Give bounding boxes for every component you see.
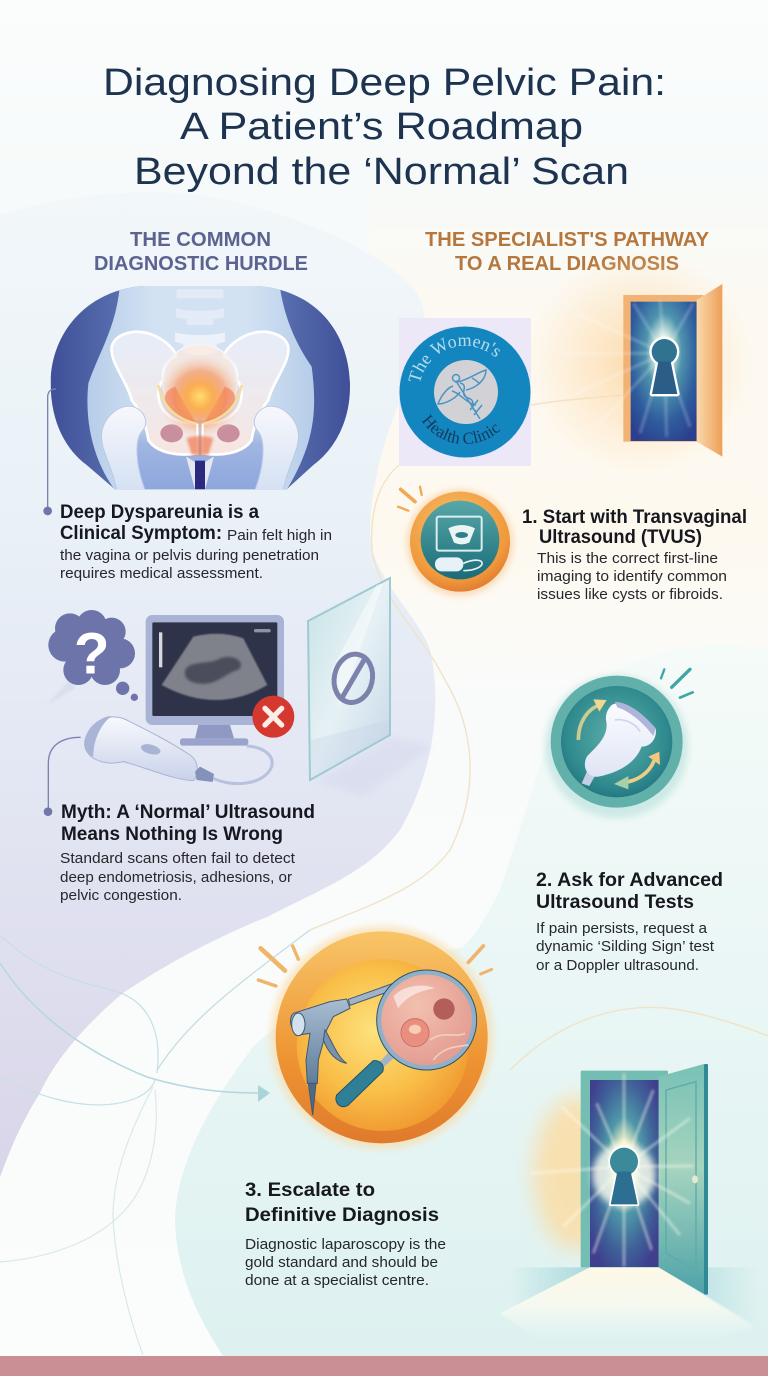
text: step 2: 2. Ask for Advanced <box>536 870 723 891</box>
heading: the common diagnostic hurdle <box>94 229 308 275</box>
logo: the women's health clinic <box>399 318 531 466</box>
logo: the women's health clinic: Health Clinic <box>422 414 500 444</box>
decorative ticks <box>258 946 492 986</box>
text: myth: Standard scans often fail to detect <box>60 850 296 867</box>
logo: the women's health clinic: The Women's <box>408 337 500 382</box>
right iliac wing <box>203 332 288 455</box>
illustration: ultrasound monitor, probe, myth <box>44 578 433 816</box>
text: myth: deep endometriosis, adhesions, or <box>60 869 292 886</box>
text: step 1: 1. Start with Transvaginal <box>522 507 747 528</box>
bottom band <box>0 1356 768 1376</box>
text: step 2: If pain persists, request a <box>536 920 708 937</box>
title: Beyond the ‘Normal’ Scan <box>134 151 629 193</box>
text: deep dyspareunia <box>60 502 332 582</box>
icon: question cloud <box>47 610 138 705</box>
arrow into step 3 <box>258 1085 270 1102</box>
text: deep dyspareunia: Pain felt high in <box>227 527 332 544</box>
text: step 1: imaging to identify common <box>537 568 727 585</box>
icon: step 1 ultrasound monitor <box>398 487 513 596</box>
text: step 3: Definitive Diagnosis <box>245 1205 439 1226</box>
text: step 2 <box>536 870 723 974</box>
icon: step 2 probe with motion arrows <box>545 669 693 818</box>
text: step 1: issues like cysts or fibroids. <box>537 586 723 603</box>
text: step 3: done at a specialist centre. <box>245 1272 429 1289</box>
text: deep dyspareunia: the vagina or pelvis during penetration <box>60 547 319 564</box>
title <box>103 62 666 193</box>
text: myth: Means Nothing Is Wrong <box>61 824 283 845</box>
illustration: teal door with keyhole <box>500 1064 758 1340</box>
heading: the specialist's pathway <box>425 229 710 275</box>
title: A Patient’s Roadmap <box>180 106 583 148</box>
keyhole <box>652 339 677 394</box>
callout pointer <box>44 737 81 816</box>
text: deep dyspareunia: requires medical assessment. <box>60 565 263 582</box>
text: step 2: dynamic ‘Silding Sign’ test <box>536 938 715 955</box>
text: step 1: This is the correct first-line <box>537 550 718 567</box>
text: step 3: Diagnostic laparoscopy is the <box>245 1236 446 1253</box>
title: Diagnosing Deep Pelvic Pain: <box>103 62 666 104</box>
text: step 3: 3. Escalate to <box>245 1180 375 1201</box>
text: myth <box>60 802 315 904</box>
decorative ticks <box>661 669 693 698</box>
illustration: pelvis with pain glow <box>43 283 351 515</box>
text: step 2: or a Doppler ultrasound. <box>536 957 699 974</box>
text: myth: Myth: A ‘Normal’ Ultrasound <box>61 802 315 823</box>
text: deep dyspareunia: Clinical Symptom: <box>60 523 222 544</box>
heading: the specialist's pathway: TO A REAL DIAGNOSIS <box>455 253 679 275</box>
pathway connector lines <box>0 395 768 1355</box>
heading: the specialist's pathway: THE SPECIALIST'S PATHWAY <box>425 229 710 251</box>
text: step 3 <box>245 1180 446 1289</box>
illustration: orange door with keyhole <box>527 250 753 477</box>
text: step 3: gold standard and should be <box>245 1254 438 1271</box>
callout pointer <box>43 389 142 515</box>
icon: step 3 laparoscope and magnifier <box>258 926 493 1149</box>
heading: the common diagnostic hurdle: DIAGNOSTIC HURDLE <box>94 253 308 275</box>
monitor <box>146 615 284 746</box>
left iliac wing <box>112 332 197 455</box>
text: step 1 <box>522 507 747 603</box>
text: step 2: Ultrasound Tests <box>536 892 694 913</box>
icon: question cloud: ? <box>74 621 109 686</box>
text: step 1: Ultrasound (TVUS) <box>539 527 702 548</box>
icon: red x <box>252 696 294 738</box>
icon: glass panel with prohibition sign <box>308 578 433 797</box>
magnifier <box>336 970 477 1107</box>
probe <box>84 716 272 784</box>
heading: the common diagnostic hurdle: THE COMMON <box>130 229 271 251</box>
decorative ticks <box>398 487 422 511</box>
laparoscope <box>291 983 395 1115</box>
icon: caduceus <box>438 370 486 419</box>
text: myth: pelvic congestion. <box>60 887 182 904</box>
keyhole <box>610 1148 638 1204</box>
text: deep dyspareunia: Deep Dyspareunia is a <box>60 502 259 523</box>
